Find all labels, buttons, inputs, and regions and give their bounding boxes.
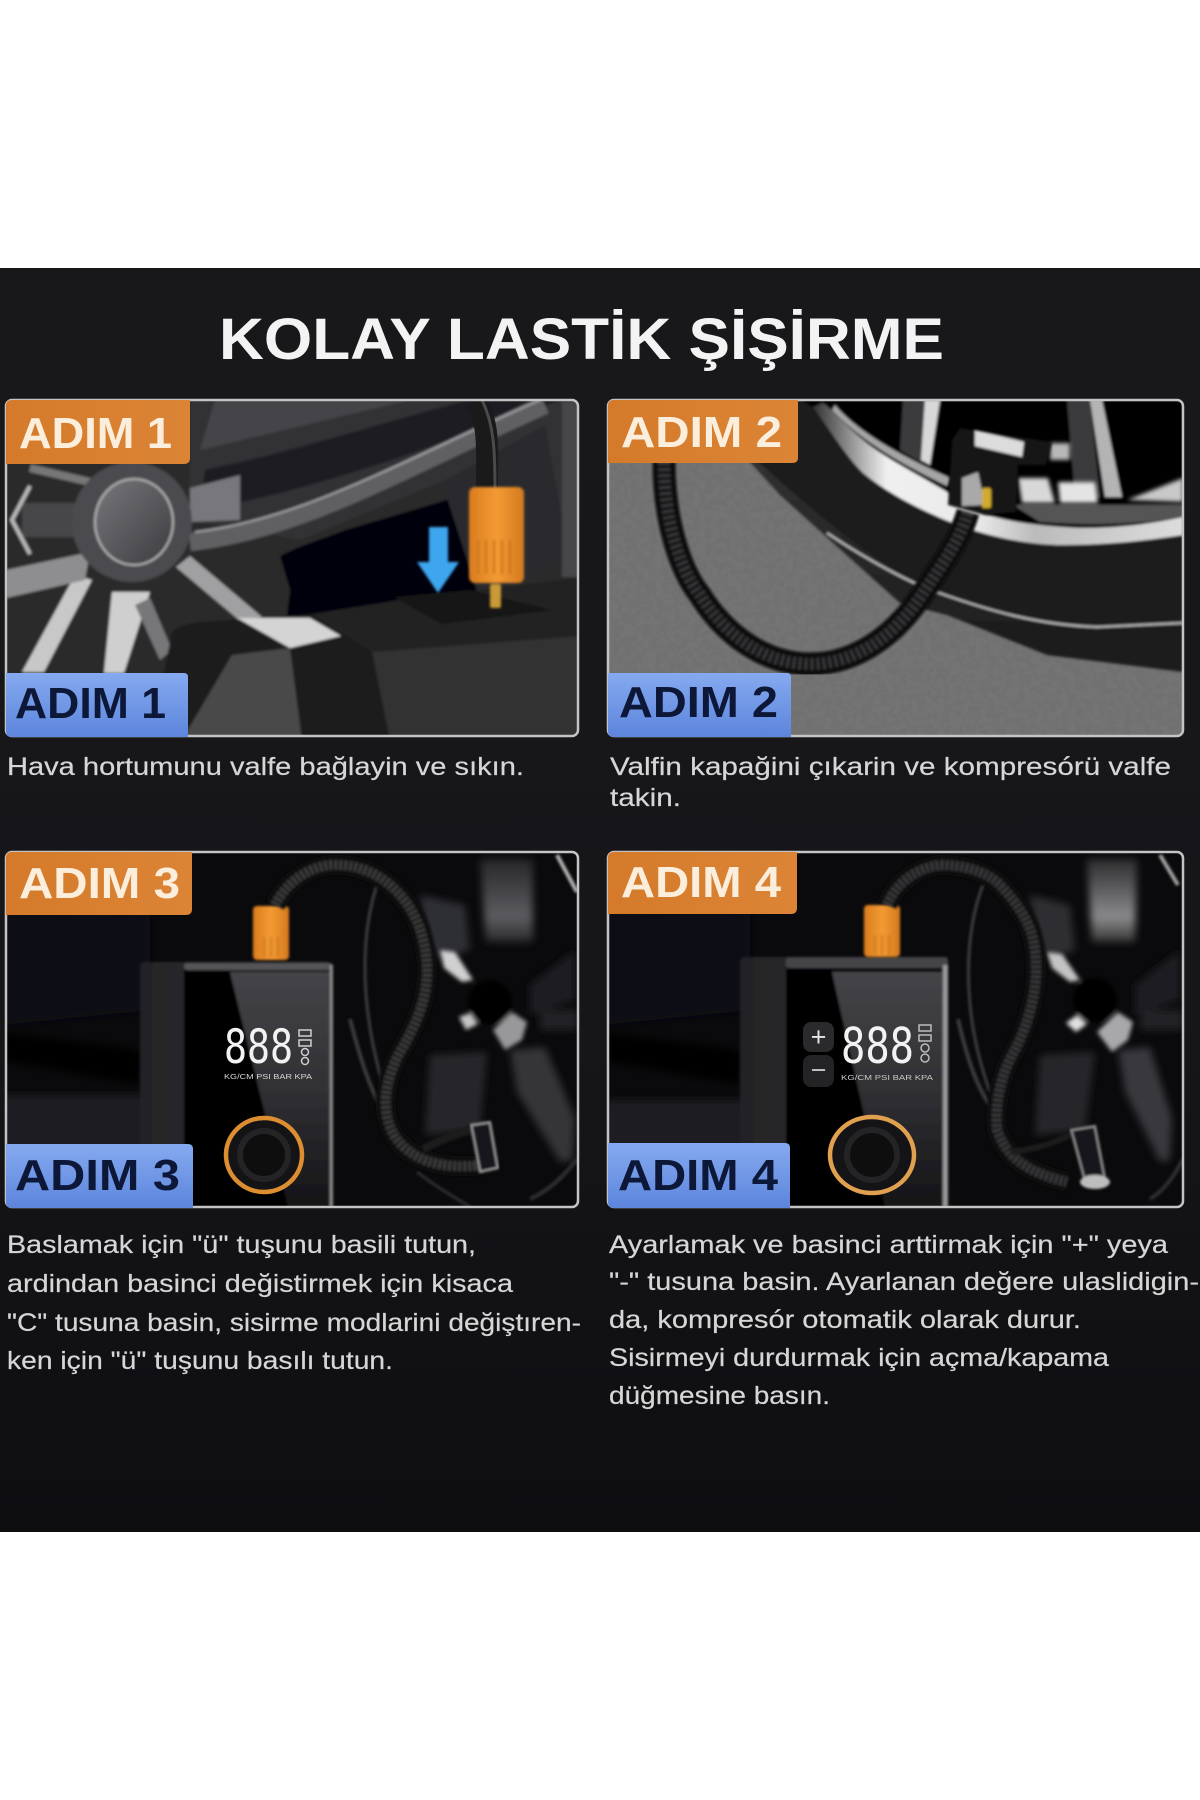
orange step label [6, 852, 192, 915]
photo: compressor with plus minus buttons [600, 852, 1183, 1207]
compressor body [740, 957, 948, 1207]
floor [609, 463, 1182, 735]
plus button: + [811, 1022, 826, 1052]
wheel behind [1030, 859, 1183, 1162]
power button with orange ring [830, 1117, 914, 1193]
caption: step 2: Valfin kapağini çıkarin ve kompresórü valfe [610, 753, 1171, 781]
display unit row: KG/CM PSI BAR KPA [841, 1075, 933, 1082]
panel: step 4 [600, 852, 1183, 1208]
hub and silver bolts [440, 950, 527, 1050]
caption: step 4: "-" tusuna basin. Ayarlanan değere ulaslidigin- [609, 1268, 1199, 1296]
orange step label: ADIM 4 [621, 858, 782, 907]
blue step label: ADIM 4 [618, 1151, 779, 1200]
photo: compressor with display [0, 852, 578, 1207]
infographic canvas [0, 268, 1200, 1532]
alloy rim [803, 401, 1182, 526]
photo: tyre and braided hose [608, 400, 1183, 736]
tyre sidewall [758, 401, 1182, 578]
frame [6, 852, 578, 1207]
caption: step 4: düğmesine basın. [609, 1382, 830, 1410]
caption: step 3: ardindan basinci değistirmek için kisaca [7, 1270, 513, 1298]
valve plate [394, 590, 552, 624]
caption: step 3: ken için "ü" tuşunu basılı tutun. [7, 1347, 393, 1375]
blue step label [6, 1144, 193, 1208]
orange step label: ADIM 2 [621, 408, 782, 457]
panel: step 3 [0, 852, 578, 1208]
caption: step 3: Baslamak için "ü" tuşunu basili tutun, [7, 1231, 476, 1259]
tyre tread [749, 463, 1182, 674]
inner rim arcs [350, 855, 577, 1207]
minus button [803, 1055, 834, 1087]
orange step label [608, 852, 797, 914]
display unit row: KG/CM PSI BAR KPA [224, 1074, 312, 1081]
orange step label [608, 400, 798, 463]
blue step label [6, 673, 188, 737]
blue step label: ADIM 2 [619, 678, 778, 727]
panel: step 1 [6, 400, 578, 740]
orange connector [864, 905, 900, 957]
hub and silver bolts [1047, 952, 1133, 1052]
compressor body [150, 578, 578, 740]
blue step label [608, 1143, 790, 1208]
caption: step 1: Hava hortumunu valfe bağlayin ve sıkın. [7, 753, 524, 781]
wheel behind [420, 859, 578, 1162]
plus button [803, 1022, 834, 1052]
blue step label: ADIM 3 [15, 1151, 180, 1200]
icon: blue down arrow [417, 527, 459, 593]
wheel hub cap [95, 479, 173, 565]
minus button: − [811, 1055, 826, 1085]
orange step label [6, 400, 190, 464]
frame [6, 400, 578, 736]
display digits: 888 [841, 1018, 914, 1075]
frame [608, 852, 1183, 1207]
blue step label [608, 673, 791, 737]
valve head [1071, 1126, 1110, 1189]
braided hose [275, 865, 483, 1166]
caption: step 3: "C" tusuna basin, sisirme modlarini değiştıren- [7, 1309, 581, 1337]
display icons [299, 1030, 311, 1064]
orange connector [469, 487, 524, 608]
photo: wheel and compressor valve [6, 400, 578, 740]
braided hose [664, 462, 968, 664]
inner rim arcs [958, 855, 1183, 1199]
display digits: 888 [224, 1020, 293, 1075]
lit rim highlights [1018, 443, 1183, 503]
display icons [919, 1025, 931, 1062]
valve connector [948, 428, 1052, 515]
blue step label: ADIM 1 [15, 679, 166, 728]
orange connector [253, 906, 289, 960]
panel: step 2 [608, 400, 1183, 737]
caption: step 4: Sisirmeyi durdurmak için açma/kapama [609, 1344, 1109, 1372]
caption: step 4: Ayarlamak ve basinci arttirmak için "+" yeya [609, 1231, 1168, 1259]
dark background band [0, 268, 1200, 1532]
braided hose [887, 865, 1070, 1182]
air hose [474, 400, 487, 490]
frame [608, 400, 1183, 736]
valve head [471, 1122, 498, 1172]
title: KOLAY LASTİK ŞİŞİRME [219, 307, 944, 372]
compressor body [140, 962, 333, 1207]
caption: step 2: takin. [610, 784, 681, 812]
orange step label: ADIM 3 [19, 859, 180, 908]
caption: step 4: da, kompresór otomatik olarak durur. [609, 1306, 1081, 1334]
orange step label: ADIM 1 [19, 409, 172, 458]
power button with orange ring [226, 1118, 302, 1192]
